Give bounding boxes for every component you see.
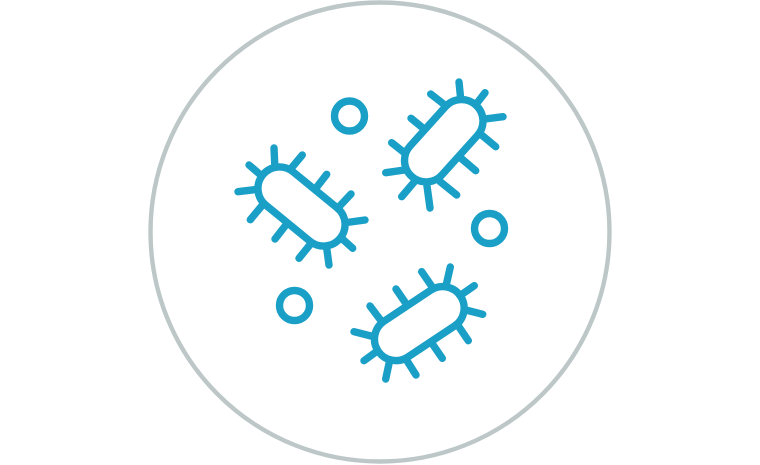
icon: bacterium top right xyxy=(386,82,503,208)
outer grey circle xyxy=(150,2,610,462)
icon: small spore right xyxy=(474,214,504,244)
icon: small spore top xyxy=(334,101,364,131)
icon: bacterium left xyxy=(238,148,365,265)
icon: bacterium bottom xyxy=(354,267,483,379)
icon: small spore bottom left xyxy=(280,290,310,320)
